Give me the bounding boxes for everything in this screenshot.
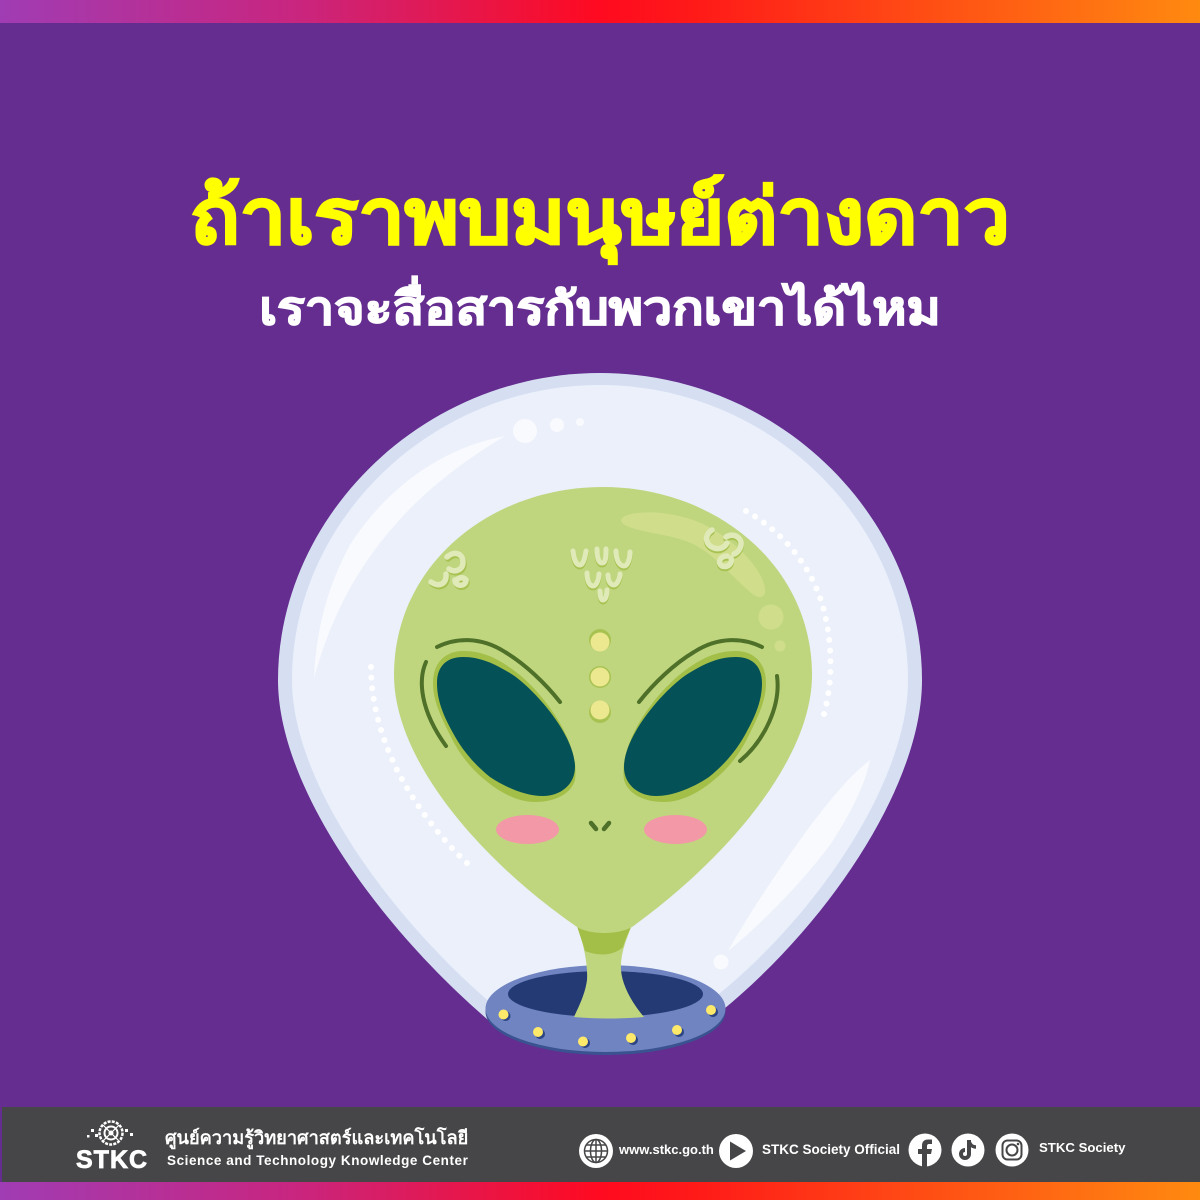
logo wordmark: STKC [76,1146,148,1174]
cheeks [496,815,707,844]
forehead markings centre [573,551,630,602]
right eye [623,651,766,802]
footer band [2,1107,1200,1182]
alien head [394,487,812,933]
helmet highlights [314,436,505,678]
forehead markings right [707,532,741,568]
brow lines [422,640,778,761]
icon: tiktok [952,1134,984,1166]
bottom gradient bar [0,1182,1200,1200]
icon: globe [579,1134,613,1168]
saucer lights [498,1005,718,1048]
instagram text: STKC Society [1039,1140,1125,1155]
left eye [433,651,576,802]
icon: play [719,1134,753,1168]
top gradient bar [0,0,1200,23]
nose [591,823,609,829]
icon: facebook [908,1134,942,1166]
glass helmet [278,373,922,1030]
saucer base [486,965,726,1055]
alien neck [574,924,644,1018]
subtitle: เราจะสื่อสารกับพวกเขาได้ไหม [259,282,941,334]
forehead markings left [432,555,467,587]
title: ถ้าเราพบมนุษย์ต่างดาว [190,175,1010,260]
center name Thai: ศูนย์ความรู้วิทยาศาสตร์และเทคโนโลยี [165,1128,468,1148]
center name English: Science and Technology Knowledge Center [167,1153,468,1168]
third-eye dots [589,629,611,723]
head highlight [621,512,765,597]
logo mark [87,1120,133,1146]
website text: www.stkc.go.th [619,1142,714,1157]
youtube text: STKC Society Official [762,1142,900,1157]
icon: instagram [996,1134,1028,1166]
STKC logo [76,1120,148,1174]
